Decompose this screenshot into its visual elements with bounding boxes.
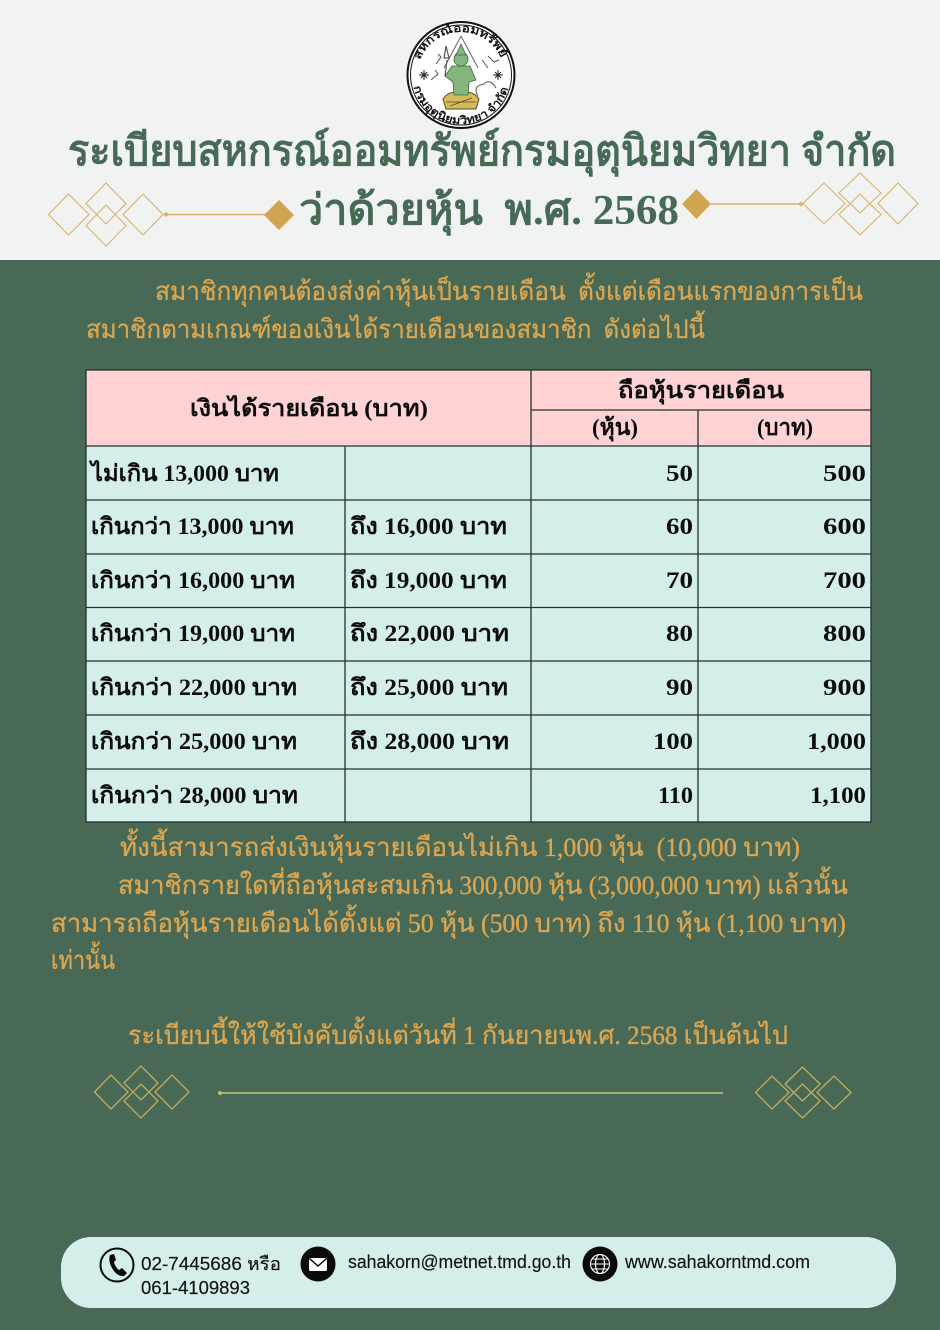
phone numbers: 02-7445686 หรือ <box>141 1254 281 1274</box>
title line 2: ว่าด้วยหุ้น พ.ศ. 2568 <box>299 188 679 236</box>
phone numbers: 061-4109893 <box>141 1278 250 1298</box>
ornament: bottom divider <box>94 1066 851 1118</box>
conditions paragraph <box>51 828 848 975</box>
table body: ไม่เกิน 13,000 บาท <box>88 459 279 486</box>
table body: ถึง 28,000 บาท <box>350 729 509 754</box>
logo: cooperative seal: สหกรณ์ออมทรัพย์ <box>415 24 508 59</box>
table body: ถึง 16,000 บาท <box>350 514 507 539</box>
table body: 500 <box>823 461 866 486</box>
table body: 800 <box>823 621 866 646</box>
table body: ถึง 19,000 บาท <box>350 568 507 593</box>
table body: ถึง 25,000 บาท <box>350 675 508 700</box>
table body: เกินกว่า 16,000 บาท <box>91 568 295 593</box>
table body: 100 <box>653 729 693 754</box>
table: monthly income and share holdings <box>86 370 871 822</box>
website: www.sahakorntmd.com <box>624 1252 810 1272</box>
icon: phone <box>100 1248 134 1282</box>
table body: 70 <box>666 568 693 593</box>
table body: เกินกว่า 28,000 บาท <box>91 783 298 808</box>
ornament: top left diamonds and line <box>48 183 294 246</box>
table body: 90 <box>666 675 693 700</box>
logo: cooperative seal: กรมอุตุนิยมวิทยา จำกัด <box>414 86 508 124</box>
logo: cooperative seal <box>406 21 516 129</box>
email address: sahakorn@metnet.tmd.go.th <box>348 1252 571 1272</box>
icon: email <box>300 1246 336 1282</box>
table body: เกินกว่า 19,000 บาท <box>91 621 295 646</box>
conditions paragraph: ทั้งนี้สามารถส่งเงินหุ้นรายเดือนไม่เกิน 1,000 หุ้น (10,000 บาท) <box>120 828 800 863</box>
intro paragraph: สมาชิกทุกคนต้องส่งค่าหุ้นเป็นรายเดือน ตั้งแต่เดือนแรกของการเป็น <box>155 272 863 307</box>
table body: 60 <box>666 514 693 539</box>
effective date: ระเบียบนี้ให้ใช้บังคับตั้งแต่วันที่ 1 กันยายนพ.ศ. 2568 เป็นต้นไป <box>128 1016 788 1050</box>
table body: 110 <box>658 783 693 808</box>
table body: 600 <box>823 514 866 539</box>
table body: 1,000 <box>807 729 866 754</box>
contact bar <box>61 1237 896 1308</box>
title line 1: ระเบียบสหกรณ์ออมทรัพย์กรมอุตุนิยมวิทยา จำกัด <box>68 127 896 177</box>
table body: ถึง 22,000 บาท <box>350 621 509 646</box>
conditions paragraph: สามารถถือหุ้นรายเดือนได้ตั้งแต่ 50 หุ้น (500 บาท) ถึง 110 หุ้น (1,100 บาท) <box>51 904 846 939</box>
table body: 50 <box>666 461 693 486</box>
table header: ถือหุ้นรายเดือน <box>618 378 784 405</box>
conditions paragraph: สมาชิกรายใดที่ถือหุ้นสะสมเกิน 300,000 หุ้น (3,000,000 บาท) แล้วนั้น <box>118 866 848 901</box>
conditions paragraph: เท่านั้น <box>51 941 115 975</box>
table header: (บาท) <box>757 415 813 440</box>
table body: 900 <box>823 675 866 700</box>
table body: 700 <box>823 568 866 593</box>
ornament: top right diamonds and line <box>682 173 918 235</box>
table body: เกินกว่า 22,000 บาท <box>91 675 297 700</box>
table body <box>86 370 871 822</box>
table body: 1,100 <box>810 783 866 808</box>
intro paragraph <box>86 272 863 344</box>
icon: globe <box>582 1246 618 1282</box>
table body: 80 <box>666 621 693 646</box>
table header: (หุ้น) <box>592 415 638 442</box>
table header <box>86 370 871 446</box>
table body: เกินกว่า 13,000 บาท <box>91 514 294 539</box>
table body: เกินกว่า 25,000 บาท <box>91 729 297 754</box>
table header: เงินได้รายเดือน (บาท) <box>190 394 428 421</box>
phone numbers <box>141 1254 281 1298</box>
intro paragraph: สมาชิกตามเกณฑ์ของเงินได้รายเดือนของสมาชิก ดังต่อไปนี้ <box>86 310 705 344</box>
